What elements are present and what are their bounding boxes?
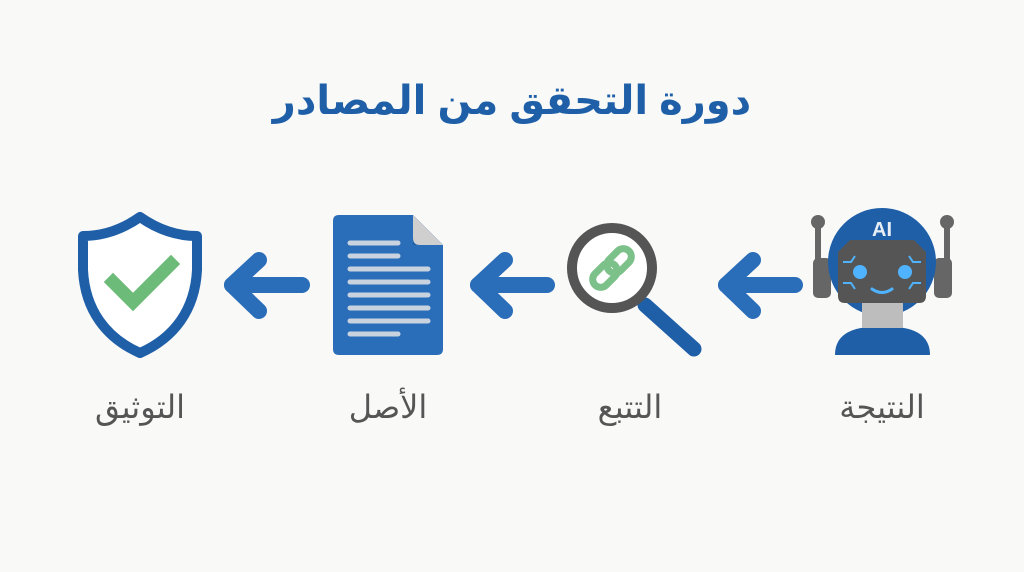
arrow 1 (232, 260, 302, 311)
arrow 2 (478, 260, 547, 311)
label: origin: الأصل (349, 387, 427, 425)
icon: AI robot: AI (872, 219, 892, 241)
icon: magnifier with link (572, 228, 694, 349)
label: result: النتيجة (839, 389, 925, 425)
title: دورة التحقق من المصادر (271, 79, 751, 124)
arrow 3 (726, 260, 795, 311)
icon: AI robot (811, 208, 954, 355)
icon: document (333, 215, 443, 355)
label: verification: التوثيق (95, 389, 185, 426)
label: tracing: التتبع (598, 389, 662, 426)
icon: shield with check (83, 217, 197, 353)
